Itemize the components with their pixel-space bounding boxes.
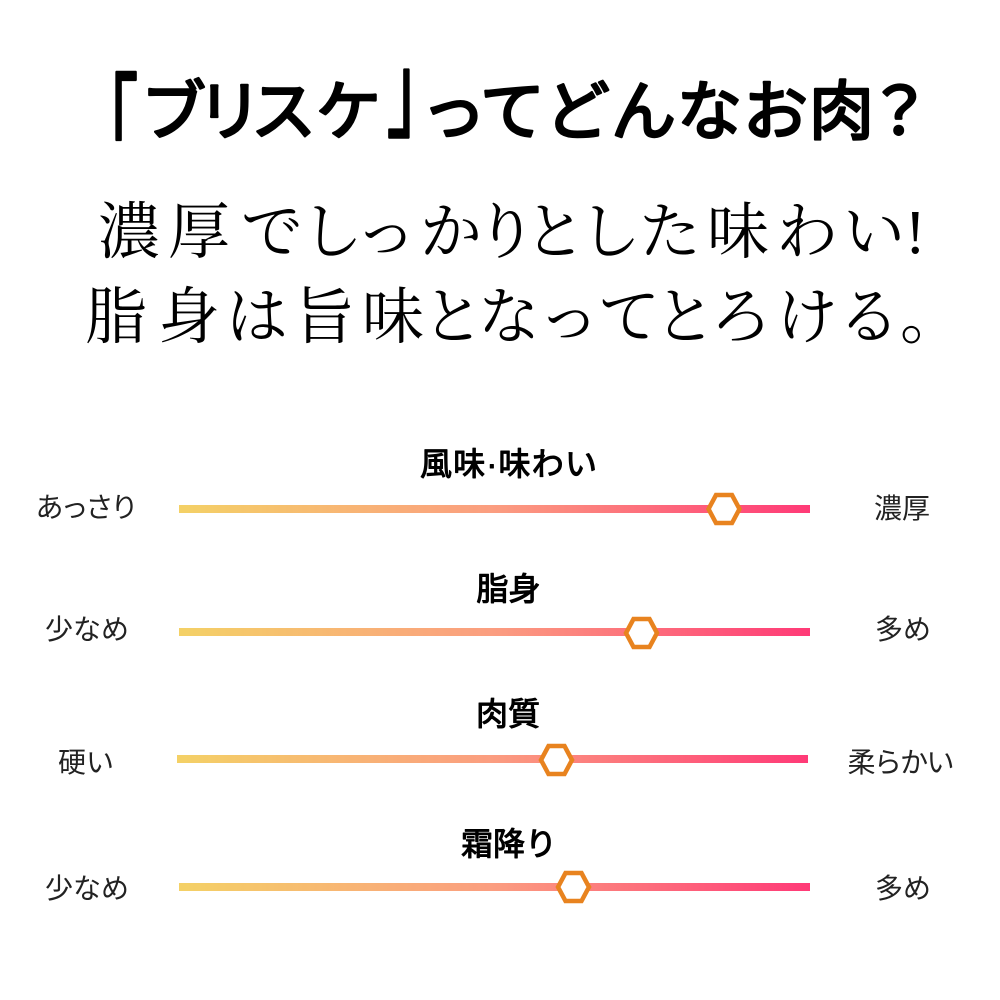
track: texture	[177, 755, 808, 763]
heading: marbling: 霜降り	[461, 826, 557, 862]
left label: firm: 硬い	[58, 747, 114, 778]
slider: fat	[45, 571, 931, 647]
title: 「	[76, 68, 138, 183]
right label: rich: 濃厚	[874, 493, 930, 524]
right label: more marbling: 多め	[875, 873, 931, 904]
track: fat	[179, 628, 810, 636]
slider: flavor	[36, 446, 930, 524]
right label: more fat: 多め	[875, 614, 931, 645]
slider: texture	[58, 696, 954, 778]
marker: fat	[626, 619, 657, 647]
subtitle line 1: 濃厚でしっかりとした味わい!	[98, 199, 926, 267]
title: ブリスケ	[141, 75, 381, 148]
subtitle line 2: 脂身は旨味となってとろける。	[85, 284, 962, 352]
left label: light: あっさり	[36, 492, 138, 523]
marker: flavor	[708, 495, 740, 523]
left label: less marbling: 少なめ	[45, 873, 129, 904]
left label: less fat: 少なめ	[45, 614, 129, 645]
title	[76, 36, 932, 183]
heading: fat: 脂身	[476, 571, 541, 607]
right label: tender: 柔らかい	[848, 747, 954, 778]
track: marbling	[179, 883, 810, 891]
track: flavor	[179, 505, 810, 513]
title: 」	[387, 36, 449, 151]
marker: marbling	[558, 873, 589, 901]
heading: texture: 肉質	[476, 696, 540, 732]
slider: marbling	[45, 826, 931, 904]
heading: flavor: 風味·味わい	[420, 446, 597, 482]
marker: texture	[541, 746, 572, 774]
title: ってどんなお肉？	[421, 75, 932, 148]
